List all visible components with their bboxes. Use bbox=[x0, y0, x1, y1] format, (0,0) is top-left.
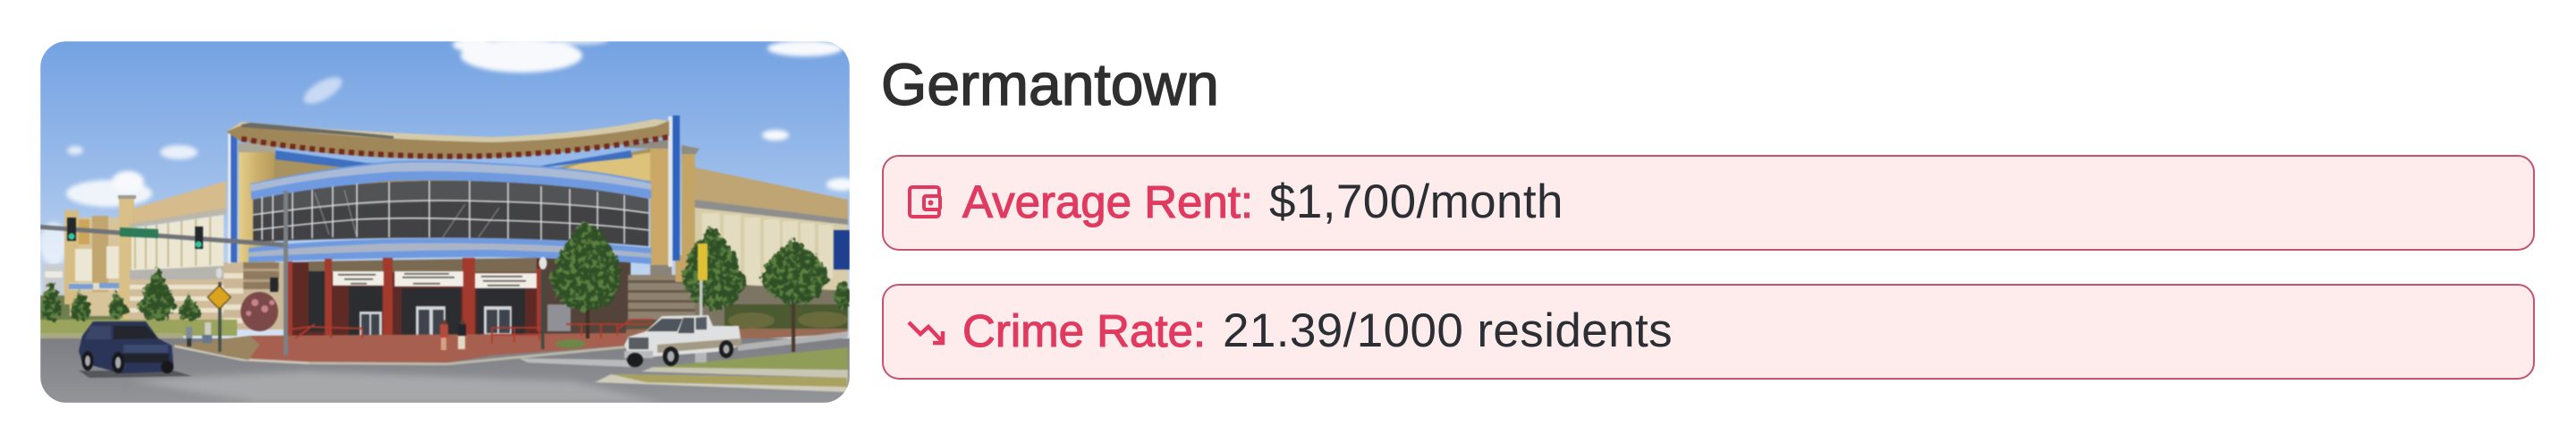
yellow post bbox=[695, 244, 708, 363]
building: entrance with red columns, marquees and doors bbox=[286, 258, 542, 340]
traffic signal pole and mast arm bbox=[40, 191, 288, 355]
building: far left wing bbox=[40, 181, 244, 324]
clouds bbox=[39, 38, 857, 265]
trees and shrubs bbox=[41, 219, 851, 352]
white pickup truck bbox=[624, 315, 741, 367]
label: Crime Rate: Crime Rate: bbox=[962, 305, 1206, 356]
building: central pillars and back walls bbox=[224, 116, 699, 340]
panel: crime rate bbox=[882, 284, 2535, 380]
building: curved blue canopy bbox=[250, 160, 651, 200]
building: glass window wall bbox=[253, 181, 648, 246]
lamp posts bbox=[216, 257, 547, 352]
heading: Germantown: Germantown bbox=[881, 51, 1219, 117]
icon: trending down arrow bbox=[907, 321, 945, 346]
sky bbox=[40, 41, 850, 346]
yellow diamond warning sign bbox=[208, 286, 231, 309]
street sign bbox=[120, 227, 158, 238]
panel: average rent bbox=[882, 155, 2535, 251]
building: right wing bbox=[695, 167, 850, 338]
value: crime rate: 21.39/1000 residents bbox=[1223, 304, 1673, 357]
building: curved roof bbox=[226, 119, 669, 170]
photo: Germantown cinema building at a street corner bbox=[40, 41, 850, 403]
value: rent: $1,700/month bbox=[1269, 175, 1563, 228]
pedestrians bbox=[186, 321, 466, 350]
red handrails bbox=[291, 320, 653, 344]
label: Average Rent: Average Rent: bbox=[962, 176, 1253, 227]
dark blue SUV bbox=[79, 321, 192, 378]
building: lower blue band bbox=[249, 238, 651, 264]
ground: grass, plaza and road bbox=[40, 320, 850, 403]
icon: wallet bbox=[908, 185, 942, 218]
